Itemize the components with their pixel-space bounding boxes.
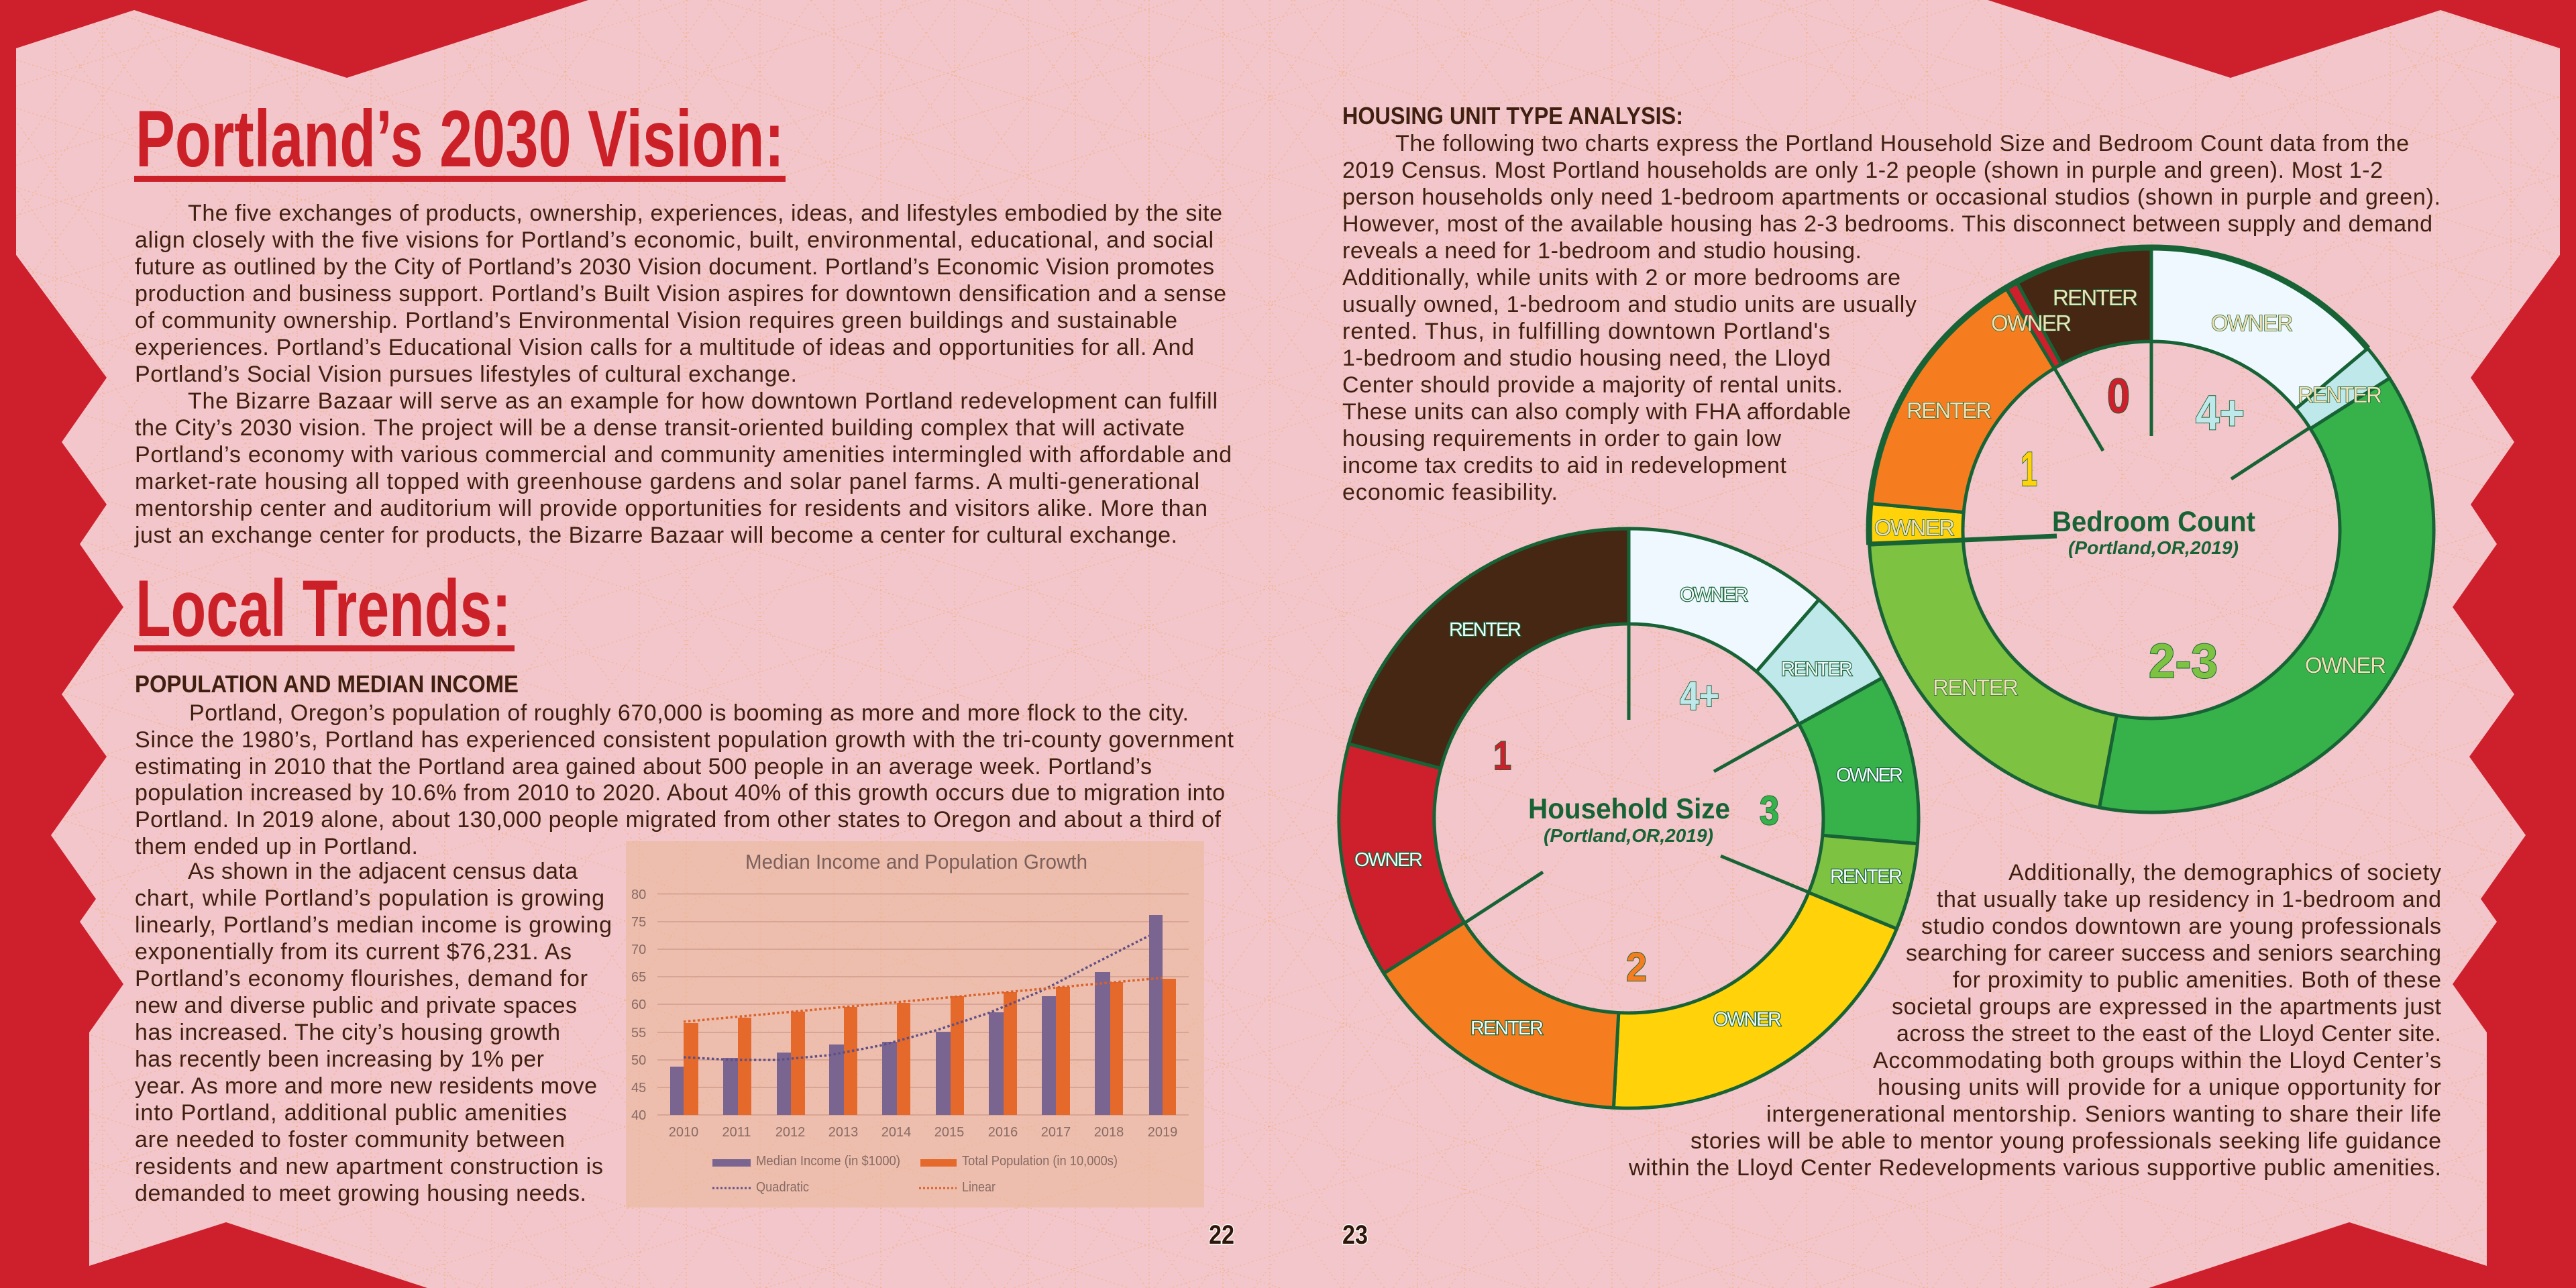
household numbers: 2 [1626, 945, 1647, 989]
text block: census chart commentary: demanded to meet growing housing needs. [135, 1181, 586, 1206]
text block: vision description: the City’s 2030 vision. The project will be a dense transit-oriented building complex that will activate [135, 415, 1185, 441]
x axis year labels [669, 1125, 1177, 1140]
text block: vision description: of community ownership. Portland’s Environmental Vision requires green buildings and sustainable [135, 308, 1177, 333]
text block: population growth: them ended up in Portland. [135, 834, 418, 859]
trendline: linear [684, 978, 1163, 1022]
chart legend: Quadratic [756, 1180, 809, 1195]
household segment labels: RENTER [1470, 1018, 1544, 1039]
chart legend: Total Population (in 10,000s) [962, 1154, 1118, 1169]
chart legend: Median Income (in $1000) [756, 1154, 900, 1169]
donut chart: bedroom count [1869, 248, 2434, 812]
text block: census chart commentary: residents and new apartment construction is [135, 1154, 603, 1179]
chart title: Median Income and Population Growth [745, 850, 1087, 873]
household segment labels: OWNER [1354, 849, 1423, 871]
x axis year labels: 2012 [775, 1125, 805, 1140]
text block: census chart commentary: are needed to foster community between [135, 1127, 565, 1152]
text block: housing analysis: economic feasibility. [1342, 480, 1558, 505]
chart gridlines and y axis [631, 888, 1189, 1123]
text block: housing analysis: rented. Thus, in fulfilling downtown Portland's [1342, 319, 1830, 344]
text block: housing analysis: reveals a need for 1-bedroom and studio housing. [1342, 238, 1862, 264]
text block: housing analysis: The following two charts express the Portland Household Size and Bedroom Count data from the [1395, 131, 2409, 156]
household segment labels: OWNER [1713, 1009, 1782, 1030]
chart gridlines and y axis: 65 [631, 970, 646, 985]
bedroom segment labels: RENTER [1907, 398, 1992, 423]
page number 23: 23 [1342, 1220, 1368, 1250]
trendline: quadratic [684, 936, 1149, 1060]
text block: population growth: Portland, Oregon’s population of roughly 670,000 is booming as more and more flock to the city. [189, 700, 1189, 726]
chart legend [712, 1154, 1118, 1195]
text block: demographics: that usually take up residency in 1-bedroom and [1937, 887, 2441, 912]
bedroom segment labels: RENTER [2298, 382, 2382, 407]
text block: census chart commentary [135, 859, 612, 1206]
text block: housing analysis: 1-bedroom and studio housing need, the Lloyd [1342, 345, 1831, 371]
x axis year labels: 2010 [669, 1125, 698, 1140]
chart gridlines and y axis: 55 [631, 1026, 646, 1040]
chart gridlines and y axis: 60 [631, 998, 646, 1012]
x axis year labels: 2014 [881, 1125, 911, 1140]
text block: demographics: within the Lloyd Center Redevelopments various supportive public amenities. [1628, 1155, 2441, 1181]
text block: population growth: population increased by 10.6% from 2010 to 2020. About 40% of this growth occurs due to migration into [135, 780, 1225, 806]
household segment labels [1354, 584, 1903, 1039]
chart gridlines and y axis: 70 [631, 943, 646, 957]
bedroom segment labels: RENTER [1933, 675, 2019, 700]
bedroom numbers: 2-3 [2149, 635, 2218, 688]
chart gridlines and y axis: 80 [631, 888, 646, 902]
household ring segments [1339, 529, 1919, 1108]
text block: demographics: societal groups are expressed in the apartments just [1892, 994, 2442, 1020]
household segment labels: RENTER [1781, 659, 1853, 680]
household numbers [1493, 674, 1779, 989]
text block: census chart commentary: As shown in the adjacent census data [188, 859, 578, 884]
bedroom chart title: Bedroom Count [2052, 506, 2255, 538]
text block: demographics: searching for career success and seniors searching [1906, 941, 2441, 966]
text block: housing analysis: income tax credits to aid in redevelopment [1342, 453, 1787, 478]
x axis year labels: 2018 [1094, 1125, 1124, 1140]
bedroom spokes [1870, 341, 2310, 544]
median income bars [670, 915, 1163, 1115]
text block: demographics: across the street to the east of the Lloyd Center site. [1896, 1021, 2441, 1046]
text block: census chart commentary: has increased. The city’s housing growth [135, 1020, 560, 1045]
household segment labels: OWNER [1680, 584, 1748, 606]
text block: census chart commentary: year. As more and more new residents move [135, 1073, 597, 1099]
text block: housing analysis [1342, 131, 2440, 505]
text block: demographics: intergenerational mentorship. Seniors wanting to share their life [1766, 1102, 2441, 1127]
text block: vision description: experiences. Portland’s Educational Vision calls for a multitude of ideas and opportunities for all. And [135, 335, 1194, 360]
household segment labels: OWNER [1836, 765, 1903, 786]
bedroom segment labels: OWNER [1991, 311, 2072, 335]
chart legend: Linear [962, 1180, 996, 1195]
bedroom segment labels [1874, 285, 2386, 700]
text block: housing analysis: 2019 Census. Most Portland households are only 1-2 people (shown in purple and green). Most 1-2 [1342, 158, 2383, 183]
text block: vision description: market-rate housing all topped with greenhouse gardens and solar panel farms. A multi-generational [135, 469, 1199, 494]
text block: demographics [1628, 860, 2442, 1181]
household chart title: Household Size [1528, 793, 1730, 825]
bedroom segment labels: OWNER [1874, 515, 1955, 540]
text block: housing analysis: person households only need 1-bedroom apartments or occasional studios (shown in purple and green). [1342, 184, 2440, 210]
text block: vision description: mentorship center and auditorium will provide opportunities for residents and visitors alike. More than [135, 496, 1208, 521]
bedroom numbers [2021, 370, 2245, 688]
text block: vision description: The Bizarre Bazaar will serve as an example for how downtown Portland redevelopment can fulfill [188, 388, 1218, 414]
x axis year labels: 2011 [722, 1125, 751, 1140]
text block: housing analysis: Additionally, while units with 2 or more bedrooms are [1342, 265, 1900, 290]
text block: census chart commentary: chart, while Portland’s population is growing [135, 885, 604, 911]
household numbers: 3 [1760, 788, 1779, 833]
text block: census chart commentary: new and diverse public and private spaces [135, 993, 577, 1018]
household chart title: (Portland,OR,2019) [1544, 825, 1713, 846]
bedroom segment labels: OWNER [2305, 653, 2386, 678]
x axis year labels: 2013 [828, 1125, 858, 1140]
text block: housing analysis: Center should provide a majority of rental units. [1342, 372, 1843, 398]
text block: vision description [134, 201, 1232, 548]
text block: demographics: for proximity to public amenities. Both of these [1953, 967, 2441, 993]
household spokes [1464, 624, 1809, 923]
bedroom chart title: (Portland,OR,2019) [2068, 537, 2239, 558]
text block: vision description: just an exchange center for products, the Bizarre Bazaar will become a center for cultural exchange. [134, 523, 1177, 548]
text block: census chart commentary: exponentially from its current $76,231. As [135, 939, 572, 965]
page number 22: 22 [1209, 1220, 1234, 1250]
text block: demographics: Accommodating both groups within the Lloyd Center’s [1873, 1048, 2441, 1073]
heading: Local Trends: Local Trends: [136, 564, 511, 653]
bedroom chart title [2052, 506, 2255, 558]
bedroom numbers: 4+ [2196, 386, 2245, 440]
chart gridlines and y axis: 40 [631, 1108, 646, 1123]
text block: census chart commentary: Portland’s economy flourishes, demand for [135, 966, 588, 991]
text block: vision description: future as outlined by the City of Portland’s 2030 Vision document. Portland’s Economic Vision promotes [135, 254, 1214, 280]
household segment labels: RENTER [1830, 866, 1902, 888]
bedroom numbers: 1 [2021, 443, 2037, 496]
text block: demographics: Additionally, the demographics of society [2008, 860, 2441, 885]
heading: Portland's 2030 Vision: Portland’s 2030 Vision: [136, 94, 784, 184]
bar chart: median income and population growth [626, 841, 1204, 1208]
text block: housing analysis: housing requirements in order to gain low [1342, 426, 1781, 451]
text block: vision description: Portland’s Social Vision pursues lifestyles of cultural exchange. [135, 362, 797, 387]
text block: demographics: studio condos downtown are young professionals [1921, 914, 2441, 939]
text block: housing analysis: However, most of the available housing has 2-3 bedrooms. This disconnect between supply and demand [1342, 211, 2432, 237]
text block: census chart commentary: into Portland, additional public amenities [135, 1100, 567, 1126]
household segment labels: RENTER [1449, 619, 1521, 641]
bedroom numbers: 0 [2107, 370, 2130, 423]
household numbers: 4+ [1680, 674, 1719, 718]
x axis year labels: 2016 [988, 1125, 1018, 1140]
chart gridlines and y axis: 50 [631, 1053, 646, 1068]
text block: vision description: align closely with the five visions for Portland’s economic, built, environmental, educational, and social [135, 227, 1214, 253]
household numbers: 1 [1493, 733, 1511, 778]
x axis year labels: 2015 [934, 1125, 964, 1140]
bedroom segment labels: OWNER [2211, 311, 2293, 335]
text block: vision description: The five exchanges of products, ownership, experiences, ideas, and lifestyles embodied by the site [188, 201, 1222, 226]
bedroom ring segments [1869, 248, 2434, 812]
x axis year labels: 2019 [1148, 1125, 1177, 1140]
text block: population growth: Since the 1980’s, Portland has experienced consistent population growth with the tri-county government [135, 727, 1234, 753]
text block: population growth [135, 700, 1234, 859]
subheading: housing unit type analysis: HOUSING UNIT TYPE ANALYSIS: [1342, 102, 1683, 129]
household chart title [1528, 793, 1730, 846]
subheading: population and median income: POPULATION AND MEDIAN INCOME [135, 670, 519, 698]
text block: housing analysis: These units can also comply with FHA affordable [1342, 399, 1851, 425]
text block: population growth: estimating in 2010 that the Portland area gained about 500 people in an average week. Portland’s [135, 754, 1152, 780]
text block: vision description: Portland’s economy with various commercial and community amenities intermingled with affordable and [135, 442, 1232, 468]
text block: census chart commentary: linearly, Portland’s median income is growing [135, 912, 612, 938]
chart gridlines and y axis: 45 [631, 1081, 646, 1095]
donut chart: household size [1339, 529, 1919, 1108]
text block: census chart commentary: has recently been increasing by 1% per [135, 1046, 544, 1072]
total population bars [684, 979, 1176, 1115]
bedroom segment labels: RENTER [2053, 285, 2138, 310]
text block: housing analysis: usually owned, 1-bedroom and studio units are usually [1342, 292, 1917, 317]
text block: vision description: production and business support. Portland’s Built Vision aspires for downtown densification and a sense [135, 281, 1226, 307]
text block: population growth: Portland. In 2019 alone, about 130,000 people migrated from other states to Oregon and about a third of [135, 807, 1222, 833]
x axis year labels: 2017 [1041, 1125, 1071, 1140]
text block: demographics: stories will be able to mentor young professionals seeking life guidance [1690, 1128, 2441, 1154]
text block: demographics: housing units will provide for a unique opportunity for [1878, 1075, 2441, 1100]
chart gridlines and y axis: 75 [631, 915, 646, 930]
